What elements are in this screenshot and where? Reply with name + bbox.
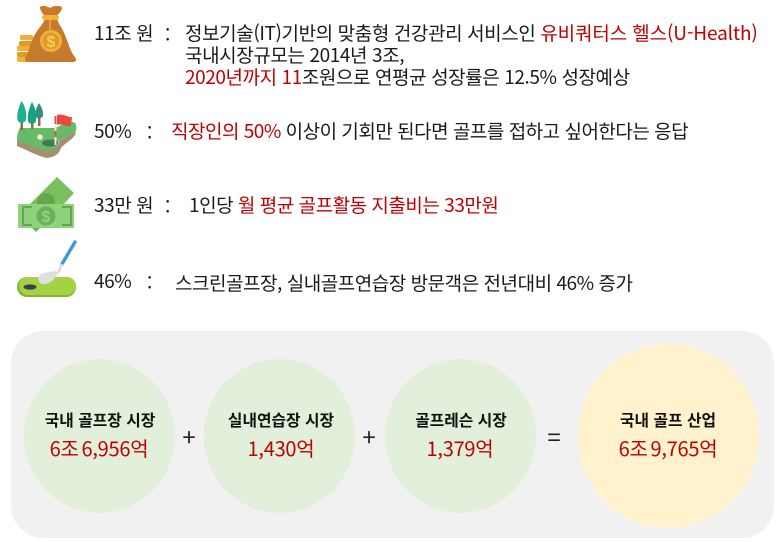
text: U-Health market description bbox=[185, 19, 758, 90]
text: 50% label: 50% bbox=[94, 117, 131, 144]
value: 6조 9,765억: 6조 9,765억 bbox=[619, 433, 717, 462]
text: U-Health market description: 국내시장규모는 2014년 3조, bbox=[185, 41, 404, 68]
plus sign: + bbox=[182, 418, 196, 453]
circle: domestic golf course market bbox=[24, 359, 175, 513]
text: 33만원 description: 1인당 월 평균 골프활동 지출비는 33만원 bbox=[189, 191, 498, 218]
text: U-Health market description: 2020년까지 11조원으로 연평균 성장률은 12.5% 성장예상 bbox=[185, 63, 630, 90]
value: 1,430억: 1,430억 bbox=[248, 433, 314, 462]
icon: money bag with coins: $ bbox=[47, 34, 56, 51]
heading: 골프레슨 시장: 골프레슨 시장 bbox=[415, 408, 507, 431]
text: 46% label bbox=[94, 267, 152, 296]
icon: green banknotes bbox=[18, 177, 74, 232]
text: 50% label bbox=[94, 117, 152, 146]
text: 33만원 label: : bbox=[165, 193, 170, 220]
text: 50% label: : bbox=[147, 119, 152, 146]
text: U-Health market description: 정보기술(IT)기반의 맞춤형 건강관리 서비스인 유비쿼터스 헬스(U-Health) bbox=[185, 19, 758, 46]
circle: domestic golf industry total bbox=[578, 344, 759, 528]
panel: golf industry market sum bbox=[11, 331, 774, 538]
value: 6조 6,956억: 6조 6,956억 bbox=[50, 433, 148, 462]
heading: 실내연습장 시장: 실내연습장 시장 bbox=[228, 408, 334, 431]
text: 46% description: 스크린골프장, 실내골프연습장 방문객은 전년대비 46% 증가 bbox=[175, 269, 632, 296]
text: 33만원 label: 33만 원 bbox=[94, 191, 153, 218]
icon: golf club and ball on green bbox=[17, 240, 77, 297]
text: 46% label: 46% bbox=[94, 267, 131, 294]
equals sign: = bbox=[547, 418, 561, 453]
circle: golf lesson market bbox=[385, 359, 536, 513]
icon: green banknotes: $ bbox=[42, 209, 51, 226]
value: 1,379억: 1,379억 bbox=[427, 433, 493, 462]
text: 50% description: 직장인의 50% 이상이 기회만 된다면 골프를 접하고 싶어한다는 응답 bbox=[171, 117, 688, 144]
text: 11조원 label: 11조 원 bbox=[94, 19, 153, 46]
heading: 국내 골프 산업: 국내 골프 산업 bbox=[620, 408, 716, 431]
icon: money bag with coins bbox=[17, 6, 76, 62]
circle: indoor practice range market bbox=[204, 359, 355, 513]
plus sign: + bbox=[362, 418, 376, 453]
text: 11조원 label: : bbox=[165, 21, 170, 48]
text: 46% label: : bbox=[147, 269, 152, 296]
heading: 국내 골프장 시장: 국내 골프장 시장 bbox=[45, 408, 155, 431]
icon: golf course with flag bbox=[17, 101, 76, 158]
